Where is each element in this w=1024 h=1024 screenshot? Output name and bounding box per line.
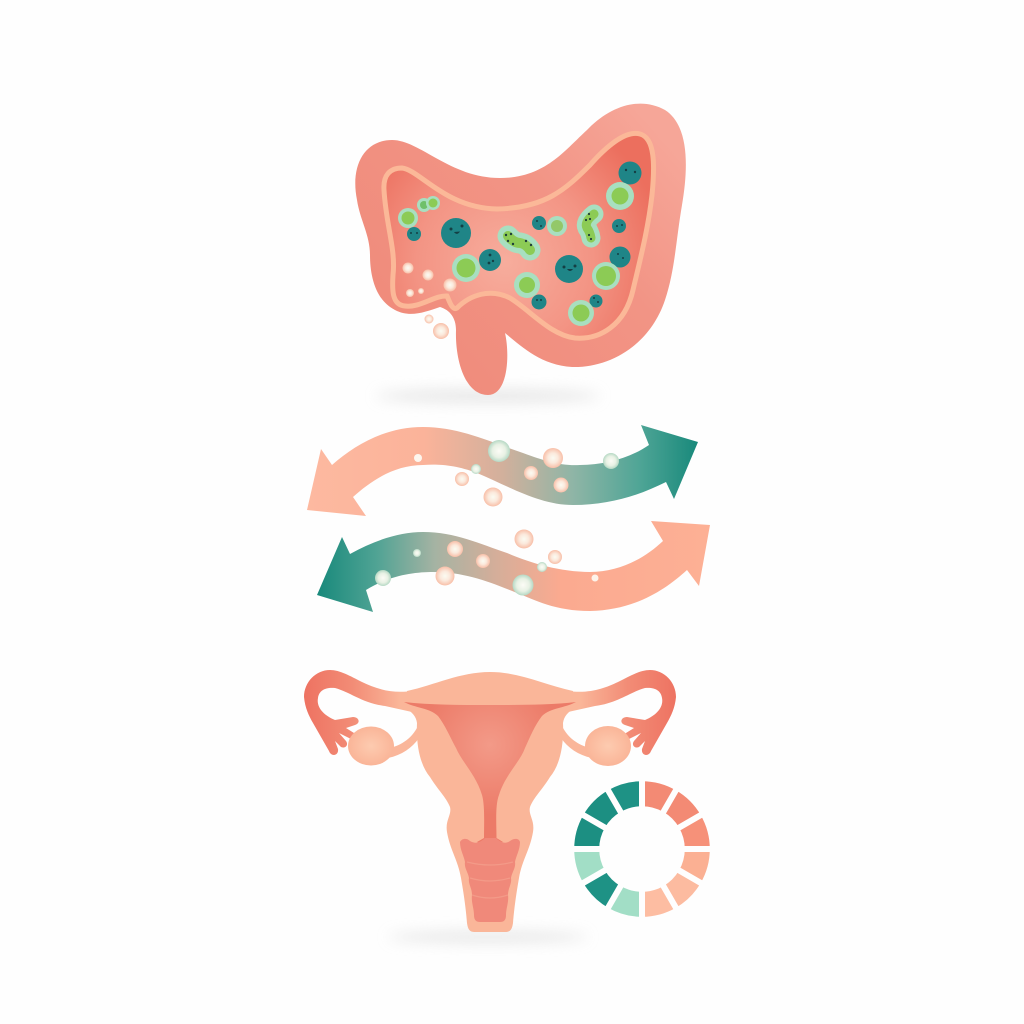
intestine outer wall (355, 104, 686, 395)
intestine illustration (355, 104, 686, 403)
uterus ground shadow (388, 931, 588, 943)
vaginal ridge lines (467, 862, 513, 898)
right ovary (585, 726, 631, 766)
arrow: gut to uterus and back, top (307, 425, 698, 516)
right fallopian tube (568, 670, 676, 755)
left ovarian ligament (388, 726, 419, 758)
uterus body (405, 672, 575, 932)
cycle ring (566, 773, 718, 925)
arrow bubbles (375, 440, 619, 596)
left ovary (348, 726, 394, 766)
vaginal canal with ridges (460, 838, 520, 922)
rod bacteria (508, 214, 594, 250)
intestine lumen with inner lining (384, 133, 654, 338)
right ovarian ligament (561, 726, 592, 758)
teal microbes (407, 162, 642, 310)
arrow: bottom (317, 521, 710, 612)
ring segments (566, 773, 718, 925)
uterus illustration (304, 670, 676, 943)
uterine cavity (404, 702, 576, 846)
left fallopian tube (304, 670, 412, 755)
microbe faces (410, 169, 636, 303)
two-way arrows (307, 425, 710, 612)
green microbes (398, 182, 634, 326)
bubbles inside and leaving the gut (402, 262, 456, 339)
rod bacteria spots (505, 213, 592, 246)
intestine ground shadow (376, 389, 600, 403)
